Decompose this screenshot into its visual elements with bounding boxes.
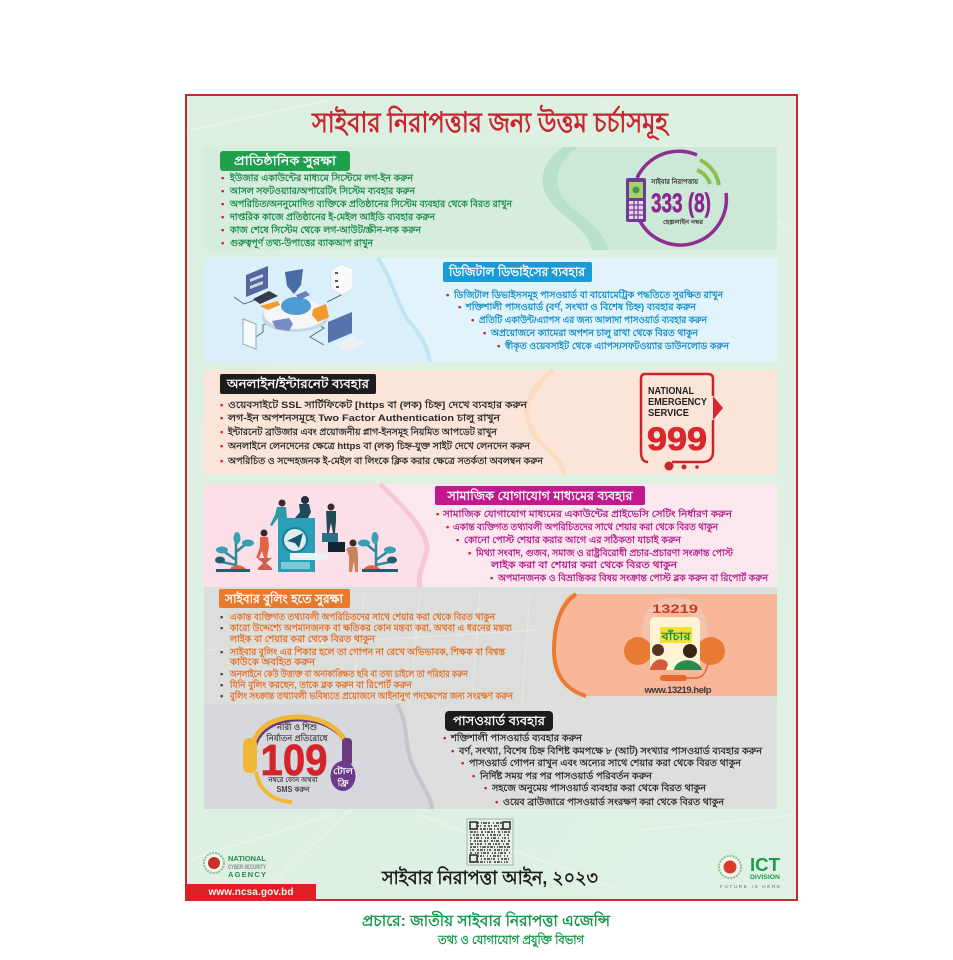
list: password use: ওয়েব ব্রাউজারে পাসওয়ার্ড সংরক্ষণ করা থেকে বিরত থাকুন — [503, 794, 725, 809]
list: online internet use: • — [220, 427, 224, 438]
list: online internet use: • — [220, 413, 224, 424]
list: social media use: অপমানজনক ও বিভ্রান্তিকর বিষয় সংক্রান্ত পোস্ট ব্লক করুন বা রিপোর্ট করুন — [497, 570, 769, 584]
list: institutional security: ইউজার একাউন্টের মাধ্যমে সিস্টেমে লগ-ইন করুন — [229, 170, 414, 184]
person right — [326, 504, 336, 533]
list: cyber bullying protection: • — [220, 623, 224, 634]
list: cyber bullying protection: কাউকে অবহিত করুন — [229, 654, 316, 668]
list: institutional security: আসল সফটওয়্যার/অপারেটিং সিস্টেম ব্যবহার করুন — [229, 183, 416, 197]
heading: digital devices: ডিজিটাল ডিভাইসের ব্যবহার — [448, 263, 586, 279]
title: সাইবার নিরাপত্তার জন্য উত্তম চর্চাসমূহ — [311, 104, 670, 141]
list: institutional security: • — [221, 199, 225, 210]
list: institutional security: • — [221, 186, 225, 197]
list: social media use: লাইক করা বা শেয়ার করা থেকে বিরত থাকুন — [490, 558, 679, 572]
illustration: people with phone — [215, 496, 398, 572]
list: password use: বর্ণ, সংখ্যা, বিশেষ চিহ্ন বিশিষ্ট কমপক্ষে ৮ (আট) সংখ্যার পাসওয়ার্ড ব্যবহার করুন — [458, 743, 763, 757]
list: social media use: • — [436, 509, 440, 520]
card: 13219 helpline: বাঁচার — [660, 629, 692, 643]
heading: digital devices — [443, 262, 592, 282]
logo: national cyber security agency: NATIONAL — [228, 854, 266, 863]
card: national emergency service 999: EMERGENCY — [648, 397, 707, 408]
list: online internet use: অনলাইনে লেনদেনের ক্ষেত্রে https বা (লক) চিহ্ন-যুক্ত সাইট দেখে লেনদেন করুন — [227, 438, 531, 453]
list: social media use: মিথ্যা সংবাদ, গুজব, সমাজ ও রাষ্ট্রবিরোধী প্রচার-প্রচারণা সংক্রান্ত পোস্ট — [475, 545, 734, 559]
heading: online internet use — [220, 374, 376, 394]
list: cyber bullying protection: একান্ত ব্যক্তিগত তথ্যাবলী অপরিচিতদের সাথে শেয়ার করা থেকে বিরত থাকুন — [230, 609, 496, 624]
list: digital devices: • — [458, 302, 462, 313]
list: cyber bullying protection — [220, 609, 514, 703]
logo: ict division: ICT — [750, 855, 780, 875]
list: cyber bullying protection: লাইক বা শেয়ার করা থেকে বিরত থাকুন — [229, 632, 376, 646]
card: 13219 helpline: 13219 — [652, 602, 698, 616]
card: national emergency service 999: NATIONAL — [648, 386, 694, 397]
logo: national cyber security agency: CYBER SECURITY — [228, 865, 266, 871]
list: cyber bullying protection: • — [220, 669, 224, 680]
heading: cyber bullying protection: সাইবার বুলিং হতে সুরক্ষা — [224, 590, 344, 608]
list: social media use: • — [446, 522, 450, 533]
list: online internet use: • — [220, 441, 224, 452]
list: cyber bullying protection: বুলিং সংক্রান্ত তথ্যাবলী ভবিষ্যতে প্রয়োজনে আইনানুগ পদক্ষেপের জন্য সংরক্ষণ করুন — [229, 688, 514, 703]
list: social media use — [436, 506, 769, 584]
list: password use: সহজে অনুমেয় পাসওয়ার্ড ব্যবহার করা থেকে বিরত থাকুন — [491, 781, 707, 795]
icon: 109 headset: নির্যাতন প্রতিরোধে — [266, 732, 329, 743]
list: online internet use — [220, 397, 544, 467]
list: social media use: একান্ত ব্যক্তিগত তথ্যাবলী অপরিচিতদের সাথে শেয়ার করা থেকে বিরত থাকুন — [453, 519, 719, 534]
list: online internet use: ইন্টারনেট ব্রাউজার এবং প্রয়োজনীয় প্লাগ-ইনসমূহ নিয়মিত আপডেট রাখুন — [227, 424, 498, 439]
icon: helpline 333 — [626, 151, 726, 245]
panel: cyber bullying protection — [204, 587, 777, 704]
heading: password use: পাসওয়ার্ড ব্যবহার — [453, 712, 546, 728]
heading: institutional security — [220, 151, 350, 171]
list: digital devices: অপ্রয়োজনে ক্যামেরা অপশন চালু রাখা থেকে বিরত থাকুন — [490, 326, 699, 340]
heading: social media use — [435, 486, 645, 505]
list: cyber bullying protection: • — [220, 612, 224, 623]
list: digital devices — [446, 287, 730, 353]
badge: toll free: টোল — [333, 764, 355, 776]
card: national emergency service 999 — [641, 374, 723, 470]
shield — [285, 269, 303, 294]
list: online internet use: • — [220, 400, 224, 411]
document — [243, 319, 256, 349]
list: social media use: • — [490, 573, 494, 584]
heading: cyber bullying protection — [219, 589, 350, 608]
website strip — [186, 884, 316, 899]
list: cyber bullying protection: সাইবার বুলিং এর শিকার হলে তা গোপন না রেখে অভিভাবক, শিক্ষক বা বিশ্বস্ত — [229, 645, 506, 659]
icon: helpline 333: হেল্পলাইন নম্বর — [663, 217, 704, 226]
list: institutional security: • — [221, 225, 225, 236]
list: institutional security: • — [221, 173, 225, 184]
list: digital devices: শক্তিশালী পাসওয়ার্ড (বর্ণ, সংখ্যা ও বিশেষ চিহ্ন) ব্যবহার করুন — [465, 299, 697, 313]
list: cyber bullying protection: • — [220, 680, 224, 691]
website strip: www.ncsa.gov.bd — [208, 887, 294, 898]
list: digital devices: • — [471, 315, 475, 326]
list: institutional security — [221, 170, 513, 250]
list: password use — [443, 730, 763, 809]
footer credit: প্রচারে: জাতীয় সাইবার নিরাপত্তা এজেন্সি — [362, 910, 612, 930]
list: password use: নির্দিষ্ট সময় পর পর পাসওয়ার্ড পরিবর্তন করুন — [479, 769, 653, 782]
card: national emergency service 999: 999 — [647, 421, 707, 457]
badge: toll free: ফ্রি — [337, 777, 349, 788]
icon: helpline 333: 333 (8) — [651, 188, 711, 218]
list: social media use: সামাজিক যোগাযোগ মাধ্যমের একাউন্টের প্রাইভেসি সেটিং নির্ধারণ করুন — [442, 506, 733, 520]
badge: toll free — [330, 761, 356, 791]
person bottom right — [346, 540, 358, 572]
list: social media use: • — [468, 548, 472, 559]
list: institutional security: অপরিচিত/অননুমোদিত ব্যক্তিকে প্রতিষ্ঠানের সিস্টেম ব্যবহার থেকে বিরত রাখুন — [229, 196, 513, 211]
plant right — [358, 532, 398, 572]
person top left — [270, 500, 287, 526]
icon: 109 headset: নম্বরে ফোন অথবা — [268, 776, 318, 784]
list: cyber bullying protection: • — [220, 647, 224, 658]
icon: helpline 333: সাইবার নিরাপত্তায় — [650, 177, 699, 186]
logo: ict division — [719, 855, 780, 889]
list: social media use: • — [456, 535, 460, 546]
QR code — [467, 819, 513, 865]
list: password use: শক্তিশালী পাসওয়ার্ড ব্যবহার করুন — [450, 730, 583, 744]
chat bubbles — [322, 533, 345, 552]
heading: institutional security: প্রাতিষ্ঠানিক সুরক্ষা — [234, 152, 338, 170]
list: password use: • — [451, 746, 455, 757]
person left — [256, 530, 269, 558]
server — [331, 264, 353, 295]
heading: online internet use: অনলাইন/ইন্টারনেট ব্যবহার — [226, 375, 370, 391]
logo: ict division: FUTURE IS HERE — [720, 884, 780, 889]
laptop — [328, 312, 352, 343]
person top center — [295, 496, 311, 518]
icon: 109 headset: 109 — [260, 736, 328, 785]
list: online internet use: ওয়েবসাইটে SSL সার্টিফিকেট [https বা (লক) চিহ্ন] দেখে ব্যবহার করুন — [228, 397, 528, 411]
monitor — [246, 266, 268, 297]
logo: ict division: DIVISION — [750, 874, 780, 881]
list: institutional security: দাপ্তরিক কাজে প্রতিষ্ঠানের ই-মেইল আইডি ব্যবহার করুন — [229, 209, 436, 223]
list: cyber bullying protection: কারো উদ্দেশ্যে অপমানজনক বা ক্ষতিকর কোন মন্তব্য করা, অথবা এ ধরনের মন্তব্য — [229, 620, 513, 634]
list: password use: • — [495, 797, 499, 808]
logo: national cyber security agency — [204, 853, 266, 879]
list: cyber bullying protection: অনলাইনে কেউ উত্ত্যক্ত বা অনাকাঙ্ক্ষিত ছবি বা তথ্য চাইলে তা পরিহার করুন — [229, 666, 469, 680]
list: password use: পাসওয়ার্ড গোপন রাখুন এবং অন্যের সাথে শেয়ার করা থেকে বিরত থাকুন — [469, 756, 742, 770]
list: cyber bullying protection: যিনি বুলিং করছেন, তাকে ব্লক করুন বা রিপোর্ট করুন — [229, 677, 413, 692]
list: institutional security: • — [221, 212, 225, 223]
list: password use: • — [484, 783, 488, 794]
list: digital devices: প্রতিটি একাউন্ট/এ্যাপস এর জন্য আলাদা পাসওয়ার্ড ব্যবহার করুন — [479, 312, 708, 326]
logo: national cyber security agency: AGENCY — [228, 870, 266, 879]
list: digital devices: • — [497, 341, 501, 352]
icon: 109 headset — [243, 717, 356, 802]
list: cyber bullying protection: • — [220, 691, 224, 702]
icon: 109 headset: নারী ও শিশু — [276, 720, 318, 732]
list: institutional security: কাজ শেষে সিস্টেম থেকে লগ-আউট/স্ক্রীন-লক করুন — [229, 222, 422, 236]
list: online internet use: লগ-ইন অপশনসমূহে Two Factor Authentication চালু রাখুন — [227, 411, 502, 425]
law title: সাইবার নিরাপত্তা আইন, ২০২৩ — [381, 866, 598, 889]
list: password use: • — [443, 733, 447, 744]
footer credit — [362, 910, 612, 949]
card: 13219 helpline — [554, 594, 777, 696]
card: 13219 helpline: www.13219.help — [644, 685, 712, 696]
card: national emergency service 999: SERVICE — [648, 408, 689, 419]
list: password use: • — [461, 758, 465, 769]
list: institutional security: গুরুত্বপূর্ণ তথ্য-উপাত্তের ব্যাকআপ রাখুন — [230, 235, 374, 250]
list: digital devices: • — [446, 290, 450, 301]
list: digital devices: • — [483, 328, 487, 339]
plant left — [215, 532, 254, 572]
list: online internet use: অপরিচিত ও সন্দেহজনক ই-মেইল বা লিংকে ক্লিক করার ক্ষেত্রে সতর্কতা অবলম্বন করুন — [227, 454, 544, 467]
footer credit: তথ্য ও যোগাযোগ প্রযুক্তি বিভাগ — [437, 931, 585, 949]
heading: password use — [445, 711, 553, 731]
panel: institutional security — [204, 147, 777, 250]
list: institutional security: • — [221, 238, 225, 249]
list: social media use: কোনো পোস্ট শেয়ার করার আগে এর সঠিকতা যাচাই করুন — [464, 532, 682, 546]
icon: 109 headset: SMS করুন — [276, 785, 311, 794]
illustration: connected devices — [234, 264, 367, 352]
panel: digital devices — [204, 258, 777, 362]
list: password use: • — [472, 771, 476, 782]
panel: password use — [204, 704, 777, 809]
heading: social media use: সামাজিক যোগাযোগ মাধ্যমের ব্যবহার — [446, 487, 634, 503]
list: digital devices: ডিজিটাল ডিভাইসসমূহ পাসওয়ার্ড বা বায়োমেট্রিক পদ্ধতিতে সুরক্ষিত রাখুন — [453, 287, 724, 302]
panel: online internet use — [204, 370, 777, 474]
list: digital devices: স্বীকৃত ওয়েবসাইট থেকে এ্যাপস/সফটওয়্যার ডাউনলোড করুন — [504, 338, 730, 353]
panel: social media use — [204, 484, 777, 587]
list: online internet use: • — [220, 456, 224, 467]
poster frame — [186, 95, 797, 900]
icon: phone — [626, 178, 646, 222]
